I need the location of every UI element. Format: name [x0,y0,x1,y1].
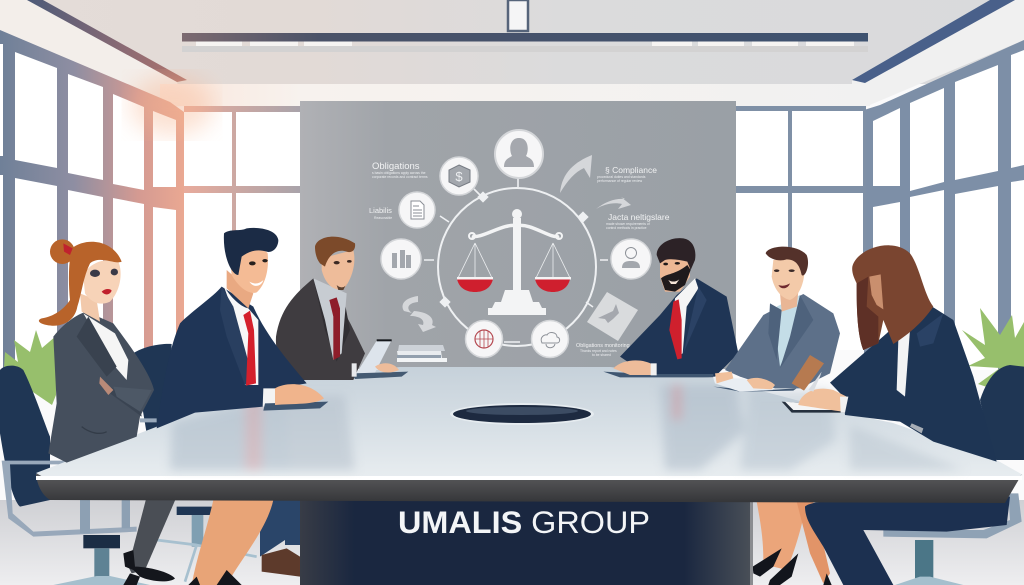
heading: Obligations: s basin obligations apply across the [372,171,426,175]
warm light glow [130,75,214,135]
table top [36,367,1023,478]
left seating and legs [0,344,300,585]
heading: Jacta: Jacta neltigslare [608,212,670,222]
presentation panel [300,101,736,369]
man second legs [188,500,273,585]
books [397,345,447,362]
heading: Compliance [597,165,657,183]
heading: Jacta: made shown requirements of [606,222,650,226]
diagram connectors [424,178,608,342]
man fourth [603,238,738,377]
front highlight [36,476,1022,480]
table [36,367,1023,503]
man second [157,228,328,428]
caption: bottom right [576,343,630,357]
heading: Obligations: corporate records and contract terms [372,175,428,179]
neck [80,293,100,322]
icon: bar chart [381,239,421,279]
woman middle [713,247,840,392]
icon: dollar hexagon [440,157,478,195]
heading: Liabilis [369,206,392,220]
heading: Compliance: performance of regular review [597,179,643,183]
caption: bottom right: to be shared [592,353,611,357]
ceiling beams and light bar [27,0,1015,83]
heading: Compliance: § Compliance [605,165,657,175]
plant left [4,330,56,405]
chair right [883,365,1024,585]
heading: Obligations [372,161,428,179]
left people [39,228,408,463]
icon: person [611,239,651,279]
heading: Compliance: procedural duties and standards [597,175,646,179]
chair second [133,344,257,582]
icon: document [399,192,435,228]
plant right [962,308,1024,388]
table centre oval [450,403,594,425]
woman left legs [123,497,177,585]
heading: Jacta: control methods in practice [606,226,647,230]
right people [603,238,997,462]
man third legs [260,500,300,577]
hair [852,245,933,350]
woman right [782,245,997,462]
icon: rotated card [587,292,638,341]
head [230,250,268,293]
heading: Liabilis: Liabilis [369,206,392,215]
hair [39,239,122,326]
icon: cloud badge [532,320,568,358]
man third [276,237,408,380]
icon: scales of justice [457,209,571,315]
chair left [0,366,150,585]
heading: Obligations: Obligations [372,161,420,172]
caption: bottom right: Thanks report and notes [580,349,617,353]
woman left [39,239,154,463]
heading: Liabilis: Reasonable [374,216,392,220]
face [869,274,883,309]
heading: Jacta [606,212,670,230]
icon: dollar hexagon: $ [455,169,463,184]
reflections [170,385,965,470]
right seating and legs [753,365,1024,585]
icon: group of people [495,130,543,178]
woman right legs [805,497,1010,585]
back windows [184,106,866,350]
arrows [403,155,631,332]
woman middle legs [753,502,832,585]
face [83,260,121,304]
logo text: UMALIS GROUP [398,504,650,540]
neck [227,270,253,308]
central ring [438,188,596,346]
ring nodes [439,191,589,308]
right windows [864,40,1024,370]
left windows [0,30,184,370]
icon: globe [466,320,502,358]
table edge [36,474,1022,503]
caption: bottom right: Obligations monitoring [576,343,630,349]
table base [300,500,753,585]
